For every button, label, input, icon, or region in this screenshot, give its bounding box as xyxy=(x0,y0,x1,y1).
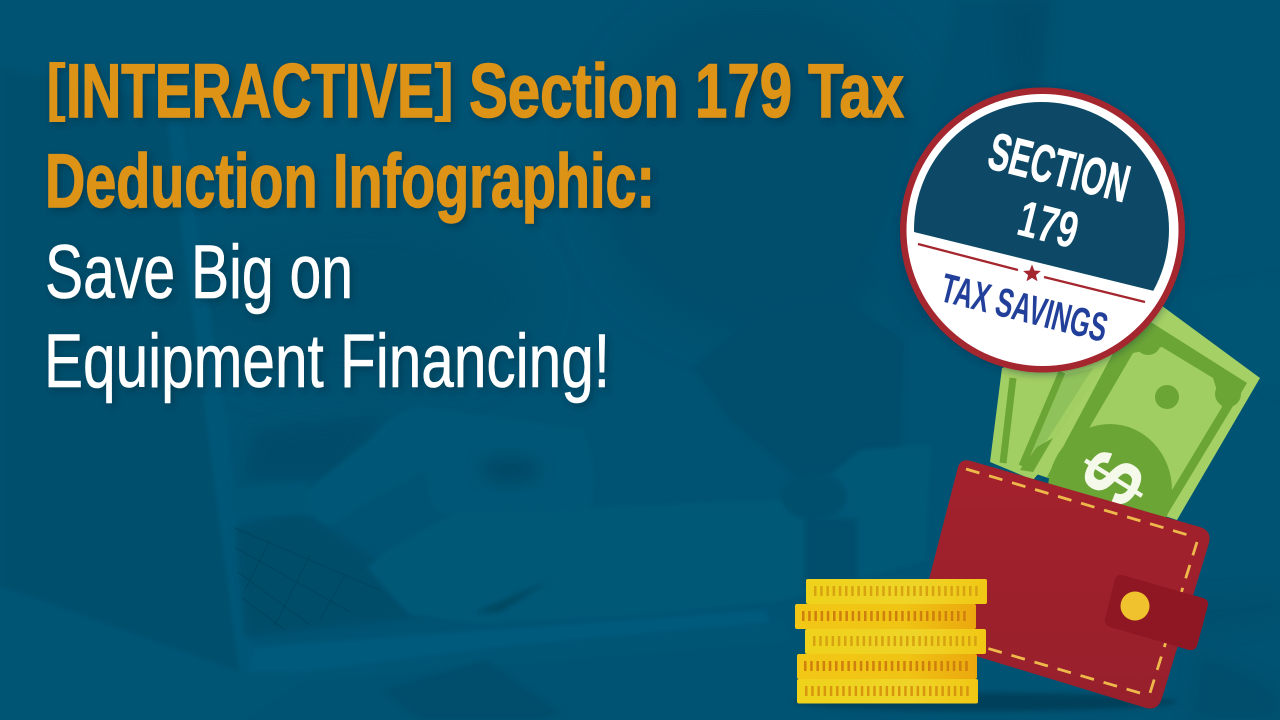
wallet clasp xyxy=(1105,575,1208,650)
coin 1 xyxy=(806,579,987,604)
coin 4 xyxy=(797,654,977,679)
icon: stack of gold coins xyxy=(795,579,987,704)
front banknote xyxy=(1033,297,1260,556)
laptop base and keyboard xyxy=(235,510,459,637)
badge text: TAX SAVINGS: TAX SAVINGS xyxy=(936,265,1112,351)
table objects xyxy=(383,660,561,720)
wallet button xyxy=(1120,592,1150,620)
title line 1: Section 179 Tax xyxy=(469,49,904,134)
wallet stitching xyxy=(925,469,1197,693)
coin 5 xyxy=(797,679,978,704)
subtitle line 2: Equipment Financing! xyxy=(44,319,610,404)
badge text: 179: 179 xyxy=(1012,189,1084,259)
title line 1: ] xyxy=(434,50,454,122)
laptop lid xyxy=(0,68,240,673)
subtitle line 1: Save Big on xyxy=(45,230,353,315)
icon: red wallet xyxy=(918,460,1210,709)
wristwatch xyxy=(781,472,847,520)
laptop screen shadow xyxy=(240,413,388,480)
dollar sign: $ xyxy=(1063,435,1164,522)
icon: banknotes xyxy=(990,297,1260,556)
badge blue segment xyxy=(914,102,1169,291)
title line 1: [ xyxy=(46,50,66,122)
back banknote xyxy=(990,335,1125,480)
coin 3 xyxy=(805,629,986,654)
title xyxy=(44,49,904,404)
title line 1: INTERACTIVE xyxy=(66,49,434,134)
badge: Section 179 tax savings xyxy=(900,88,1185,372)
coin 2 xyxy=(795,604,976,629)
hands xyxy=(306,407,594,525)
badge text: SECTION: SECTION xyxy=(983,122,1136,214)
badge red rule and star xyxy=(918,244,1145,302)
title line 1 xyxy=(46,49,904,134)
title line 2: Deduction Infographic: xyxy=(45,139,655,224)
